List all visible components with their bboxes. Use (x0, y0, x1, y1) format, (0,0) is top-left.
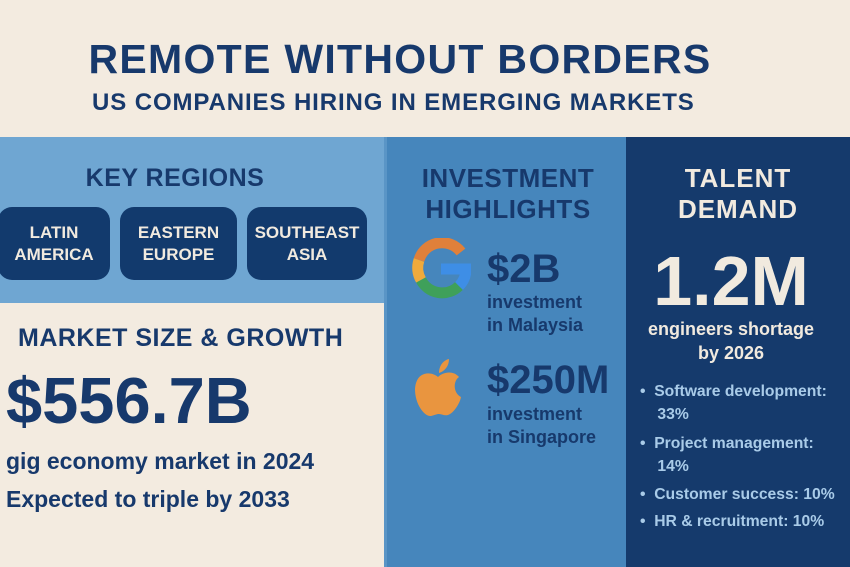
text: triple: Expected to triple by 2033 (6, 486, 290, 512)
heading: market size: MARKET SIZE & GROWTH (18, 324, 343, 352)
stat: apple: $250M (487, 358, 609, 402)
region: latin america (0, 207, 110, 280)
bullet list: • HR & recruitment: 10% (640, 513, 824, 530)
bullet list: • Software development: (640, 383, 827, 400)
bullet list (640, 383, 835, 530)
region: latin america: LATIN (30, 222, 78, 242)
heading: investment highlights (422, 163, 594, 224)
stat: apple (487, 358, 609, 447)
panel: key regions (0, 137, 384, 303)
panel: investment (384, 137, 626, 567)
region: southeast asia: SOUTHEAST (255, 222, 359, 242)
heading: talent demand (678, 163, 798, 224)
text: shortage: by 2026 (698, 343, 764, 363)
heading: key regions: KEY REGIONS (86, 164, 264, 192)
text: gig economy: gig economy market in 2024 (6, 448, 314, 474)
region: eastern europe: EASTERN (138, 222, 219, 242)
panel: talent demand (626, 137, 850, 567)
stat: apple: in Singapore (487, 427, 596, 447)
subtitle: US COMPANIES HIRING IN EMERGING MARKETS (92, 89, 695, 116)
region: eastern europe (120, 207, 237, 280)
stat: google: in Malaysia (487, 315, 583, 335)
stat: apple: investment (487, 404, 582, 424)
bullet list: • Project management: (640, 435, 814, 452)
big number: $556.7B (6, 364, 252, 437)
stat: google (487, 247, 584, 335)
stat: google: $2B (487, 247, 560, 291)
heading: talent demand: TALENT (685, 163, 791, 193)
title: REMOTE WITHOUT BORDERS (88, 36, 712, 82)
big number: 1.2M: 1.2M (653, 242, 809, 320)
icon: apple (415, 359, 461, 416)
bullet list: • Customer success: 10% (640, 486, 835, 503)
heading: talent demand: DEMAND (678, 194, 798, 224)
panel: market size (6, 324, 343, 512)
bullet list: 14% (657, 458, 689, 475)
region: latin america: AMERICA (14, 244, 94, 264)
heading: investment highlights: INVESTMENT (422, 163, 594, 193)
text: shortage (648, 319, 814, 363)
bullet list: 33% (657, 406, 689, 423)
icon: google (412, 238, 471, 298)
region: southeast asia: ASIA (287, 244, 327, 264)
region: southeast asia (247, 207, 367, 280)
region: eastern europe: EUROPE (143, 244, 214, 264)
heading: investment highlights: HIGHLIGHTS (425, 194, 591, 224)
stat: google: investment (487, 292, 582, 312)
text: shortage: engineers shortage (648, 319, 814, 339)
